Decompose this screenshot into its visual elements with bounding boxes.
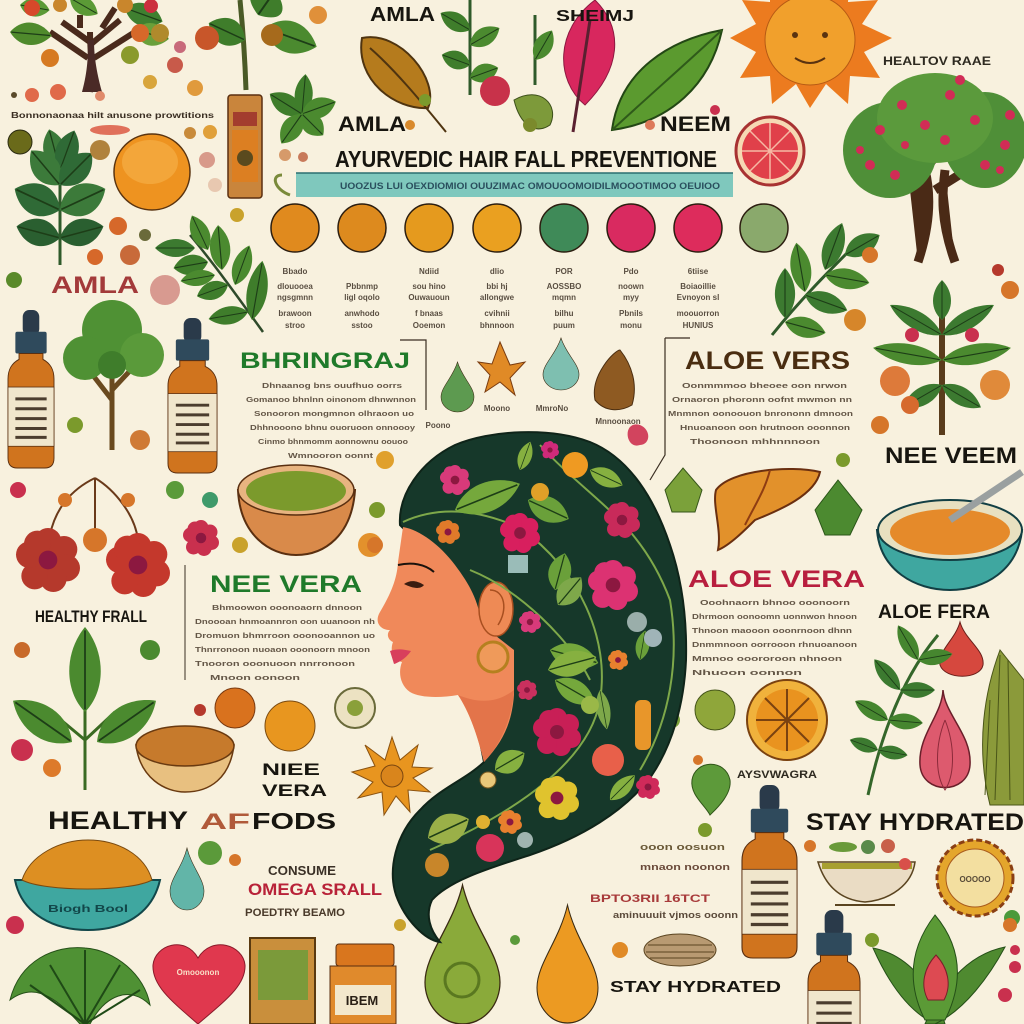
illustration: red onion (940, 622, 983, 676)
illustration: striped nut (612, 934, 716, 966)
illustration: bottle left (8, 310, 54, 468)
text block: herb captions: monu (620, 321, 642, 330)
illustration: curry bowl with spoon (877, 472, 1022, 590)
text block: nee vera: Dromuon bhmrroon ooonooannon uo (195, 631, 376, 640)
decoration: doodles around fern and orange (6, 125, 308, 305)
text block: herb captions: brawoon (278, 309, 312, 318)
text block: aloe vera: Mmnoo ooororoon nhnoon (692, 654, 843, 663)
icon: red blossom (183, 520, 219, 556)
text block: aloe vera (692, 598, 858, 677)
text block: herb captions: sou hino (412, 282, 446, 291)
label: amla top: AMLA (370, 4, 435, 26)
lips (390, 649, 411, 664)
illustration: fan palm (10, 948, 150, 1024)
illustration: leaf trio (4, 627, 165, 790)
text block: aloe vera: Ooohnaorn bhnoo ooonoorn (700, 598, 851, 607)
text block: herb captions: bhnnoon (480, 321, 514, 330)
icons: drops and herbs row: MmroNo (536, 404, 568, 413)
illustration: jar: IBEM (346, 993, 378, 1008)
illustration: yellow green leaf (514, 15, 560, 129)
text block: nee vera: Bhmoowon ooonoaorn dnnoon (212, 603, 363, 612)
illustration: orange sunflower (352, 737, 432, 815)
text block: nee vera: Thnrronoon nuoaon ooonoorn mnoon (195, 645, 371, 654)
illustration: bottle bottom right (808, 910, 860, 1024)
heading: aloe vers: ALOE VERS (685, 347, 850, 375)
ear (479, 582, 513, 636)
text block: herb captions (277, 267, 719, 330)
illustration: green drop (425, 885, 500, 1024)
illustration: gold medallion (937, 840, 1013, 916)
text block: herb captions: cvihnii (484, 309, 510, 318)
heading: stay hydrated right: STAY HYDRATED (806, 809, 1024, 836)
illustration: center sprig and red fruit (436, 0, 510, 106)
illustration: leaf branch left (155, 212, 272, 332)
icons: green rounds (664, 690, 735, 815)
illustration: gold medallion: OOOOO (959, 875, 991, 884)
text block: consume omega (245, 863, 382, 919)
text block: nee vera: Dnoooan hnmoannron oon uuanoon nh (195, 617, 376, 626)
face and neck (378, 527, 514, 762)
text block: bhringraj: Cinmo bhnmomm aonnownu oouoo (258, 437, 408, 446)
text block: bhringraj: Dhhnooono bhnu ouoruoon onnoooy (250, 423, 416, 432)
text block: aloe vera: Thnoon maooon ooonrnoon dhnn (692, 626, 853, 635)
illustration: orange slice (747, 680, 827, 760)
heading: stay hydrated bottom: STAY HYDRATED (610, 979, 781, 996)
heading: healthy foods: AF (200, 809, 250, 834)
icons: drops and herbs row (426, 338, 648, 446)
text block: herb captions: POR (555, 267, 573, 276)
divider: bracket left (400, 340, 426, 410)
illustration: teal drop (170, 848, 204, 910)
text block: herb captions: allongwe (480, 293, 515, 302)
text block: herb captions: Ndiid (419, 267, 439, 276)
fruits in hair (562, 452, 588, 478)
illustration: grain bowl (136, 726, 234, 792)
label: neem: NEEM (660, 113, 731, 136)
illustration: pink feather leaf (564, 0, 615, 132)
text block: herb captions: dlio (490, 267, 504, 276)
text block: nee vera (185, 565, 376, 682)
icons: drops and herbs row: Moono (484, 404, 510, 413)
text block: bhringraj: Sonooron mongmnon olhraoon uo (254, 409, 415, 418)
text block: aloe vers: Mnmnon oonoouon bnrononn dmnoon (668, 409, 854, 418)
illustration: leaf branch right (772, 220, 885, 343)
illustration: bottle lower right (742, 785, 797, 958)
icon: four leaf cross (264, 73, 339, 149)
text block: herb captions: stroo (285, 321, 305, 330)
illustration: lentil bowl: Biogh Bool (48, 904, 128, 915)
eyebrow and eye (398, 564, 434, 572)
text block: nee vera: Tnooron ooonuoon nnrronoon (195, 659, 356, 668)
text block: aloe vers: Ornaoron phoronn oofnt mwmon nn (672, 395, 853, 404)
text block: aloe vers: Thoonoon mhhnnnoon (690, 437, 821, 446)
illustration: fern right (848, 621, 954, 795)
label: healthy: HEALTOV RAAE (883, 56, 991, 68)
flowers in hair (440, 465, 470, 495)
text block: bhringraj: Dhnaanog bns ouufhuo oorrs (262, 381, 402, 390)
heading: aloe vera: ALOE VERA (688, 566, 865, 593)
label: nee vera small: VERA (262, 781, 327, 800)
label: amla left: AMLA (51, 272, 139, 299)
icons: drops and herbs row: Poono (426, 421, 451, 430)
label: lower red notes (590, 842, 738, 920)
illustration: orange drop (537, 905, 598, 1023)
heading: small text strip: Bonnonaonaa hilt anusone prowtitions (11, 110, 214, 120)
text block: aloe vers (668, 381, 854, 446)
text block: aloe vers: Oonmmmoo bheoee oon nrwon (682, 381, 848, 390)
text block: herb captions: anwhodo (344, 309, 380, 318)
text block: herb captions: moouorron (677, 309, 719, 318)
text block: consume omega: POEDTRY BEAMO (245, 907, 345, 919)
heading: healthy foods: HEALTHY (48, 807, 188, 835)
illustration: liver herb (715, 469, 820, 550)
heading: healthy foods: FODS (252, 808, 336, 834)
text block: herb captions: Ooemon (413, 321, 445, 330)
text block: herb captions: Bbado (283, 267, 308, 276)
icons: green leaves mid right (665, 468, 862, 535)
text block: herb captions: bilhu (554, 309, 574, 318)
icons: drops and herbs row: Mnnoonaon (595, 417, 641, 426)
text block: herb captions: 6tiise (688, 267, 709, 276)
illustration: green herb bowl (238, 465, 382, 557)
text block: herb captions: myy (623, 293, 640, 302)
heading: healthy foods (48, 807, 336, 835)
label: lower red notes: mnaon noonon (640, 862, 730, 872)
text block: herb captions: mqmn (552, 293, 576, 302)
icons: small fruits (215, 688, 375, 751)
label: lower red notes: ooon oosuon (640, 842, 725, 852)
title: AYURVEDIC HAIR FALL PREVENTIONE (335, 146, 717, 172)
hair silhouette (393, 432, 686, 942)
label: aloe fera: ALOE FERA (878, 602, 990, 623)
label: sheimj: SHEIMJ (556, 8, 634, 25)
text block: herb captions: Boiaoillie (680, 282, 716, 291)
text block: bhringraj (246, 381, 417, 460)
label: amla: AMLA (338, 113, 406, 136)
text block: herb captions: ngsgmnn (277, 293, 313, 302)
text block: aloe vers: Hnuoanoon oon hrutnoon ooonnon (680, 423, 851, 432)
text block: nee vera: Mnoon oonoon (210, 673, 301, 682)
subtitle band (296, 173, 733, 197)
illustration: lotus plant (873, 910, 1021, 1024)
heading: bhringraj: BHRINGRAJ (240, 348, 410, 373)
illustration: herb box (250, 938, 315, 1024)
text block: bhringraj: Wmnooron oonnt (288, 451, 374, 460)
illustration: amber tube (228, 95, 262, 198)
text block: aloe vera: Nhuoon oonnon (692, 668, 803, 677)
text block: herb captions: sstoo (351, 321, 373, 330)
illustration: orange fruit (114, 134, 190, 210)
illustration: red heart: Omooonon (177, 968, 219, 977)
leaves in hair (450, 470, 525, 524)
illustration: top left tree (9, 0, 203, 102)
illustration: golden leaf (361, 37, 446, 132)
illustration: lemongrass (983, 650, 1024, 805)
illustration: red heart (153, 945, 245, 1024)
text block: consume omega: OMEGA SRALL (248, 880, 382, 899)
text block: herb captions: Pbnils (619, 309, 644, 318)
label: nee vera small: NIEE (262, 760, 320, 779)
illustration: jar (330, 944, 396, 1024)
label: healthy frall: HEALTHY FRALL (35, 607, 147, 626)
text block: herb captions: Pdo (623, 267, 639, 276)
earring (478, 642, 508, 672)
subtitle band: UOOZUS LUI OEXDIOMIOI OUUZIMAC OMOUOOMOIDILMOOOTIMOO OEUIOO (340, 181, 720, 191)
illustration: grapefruit (736, 117, 804, 185)
ear inner (490, 590, 504, 625)
text block: herb captions: ligl oqolo (344, 293, 380, 302)
text block: herb captions: Evnoyon sl (677, 293, 719, 302)
text block: herb captions: noown (618, 282, 644, 291)
text block: herb captions: f bnaas (415, 309, 444, 318)
label: ashwagandha: AYSVWAGRA (737, 769, 817, 781)
illustration: right leafy tree (871, 280, 1013, 435)
text block: herb captions: HUNIUS (683, 321, 714, 330)
illustration: sun (730, 0, 892, 108)
text block: aloe vera: Dhrmoon oonoomn uonnwon hnoon (692, 612, 858, 621)
label: lower red notes: BPTO3RII 16TCT (590, 893, 710, 905)
illustration: woman profile with botanical hair (378, 432, 686, 942)
text block: aloe vera: Dnmmnoon oorrooon rhnuoanoon (692, 640, 858, 649)
text block: herb captions: Ouwauoun (408, 293, 450, 302)
illustration: bottle center left (168, 318, 217, 473)
label: lower red notes: aminuuuit vjmos ooonn (613, 910, 738, 920)
text block: bhringraj: Gomanoo bhnlnn oinonom dhnwnnon (246, 395, 417, 404)
text block: herb captions: puum (553, 321, 575, 330)
text block: herb captions: AOSSBO (547, 282, 581, 291)
divider: bracket right (650, 338, 690, 480)
illustration: large green leaf (612, 30, 722, 130)
illustration: top green sprig (195, 0, 327, 90)
text block: herb captions: bbi hj (486, 282, 508, 291)
icon row: herb circles (271, 204, 788, 252)
illustration: fern (8, 127, 112, 265)
illustration: round tree (63, 300, 164, 450)
text block: consume omega: CONSUME (268, 863, 336, 878)
text block: herb captions: dlouooea (277, 282, 313, 291)
text block: herb captions: Pbbnmp (346, 282, 378, 291)
heading: nee vera: NEE VERA (210, 571, 362, 598)
illustration: right fruit tree (843, 73, 1024, 262)
label: nee vera small (262, 760, 327, 800)
illustration: lentil bowl (15, 840, 160, 930)
illustration: dish (804, 839, 915, 905)
vine strokes (403, 445, 674, 850)
illustration: pink bulb (920, 690, 970, 790)
illustration: red flowers with stems (16, 478, 170, 597)
label: nee veem: NEE VEEM (885, 443, 1017, 468)
